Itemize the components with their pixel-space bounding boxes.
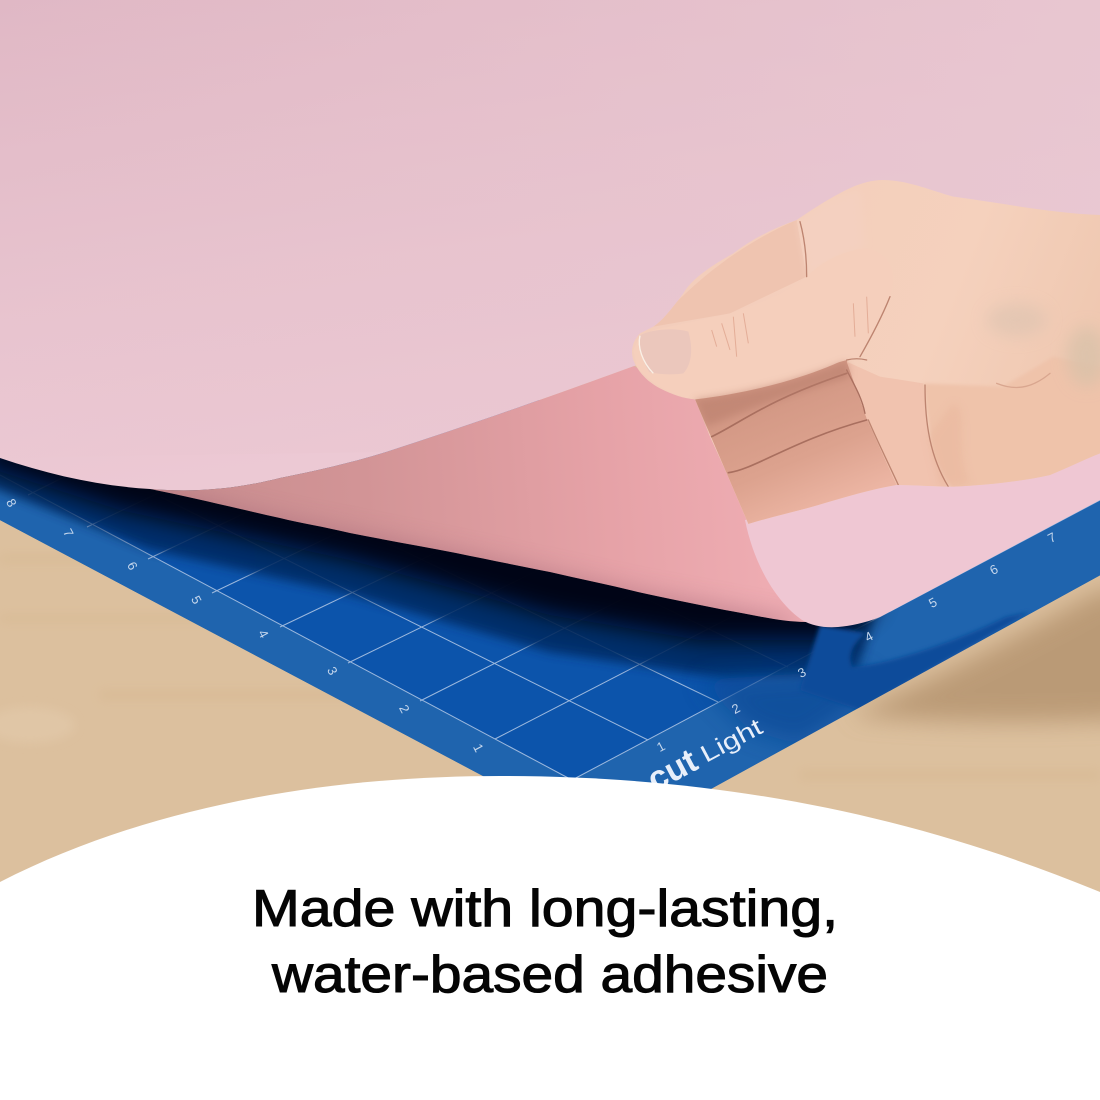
ruler numbers right edge: 3 [795, 664, 808, 681]
shadow under thumb [695, 362, 850, 427]
ruler numbers left edge: 1 [470, 741, 487, 754]
ruler numbers left edge: 3 [324, 664, 341, 677]
ruler numbers right edge [654, 529, 1058, 755]
curled fingers [695, 360, 897, 524]
ruler numbers right edge: 5 [926, 594, 939, 611]
front face beyond curl [745, 450, 1100, 627]
creases [712, 222, 1050, 487]
mat brand logo: Light [696, 713, 767, 768]
soft shadow on right mat border [700, 670, 880, 745]
ruler numbers right edge: 2 [729, 700, 742, 717]
caption heading [252, 880, 838, 1004]
white caption panel [0, 776, 1100, 1100]
top face of sheet [0, 0, 1100, 490]
ruler numbers right edge: 1 [654, 738, 667, 755]
mat border band [0, 476, 1100, 789]
ruler numbers left edge: 4 [255, 627, 272, 640]
mat brand logo [650, 720, 764, 784]
ruler numbers right edge: 7 [1045, 529, 1058, 546]
ruler numbers left edge: 8 [3, 496, 20, 509]
hand pinching the sheet [620, 170, 1100, 540]
caption heading: water-based adhesive [271, 946, 828, 1004]
curled underside of sheet [150, 366, 806, 622]
caption heading: Made with long-lasting, [252, 880, 838, 938]
mat brand logo: cut [641, 742, 704, 799]
ruler numbers right edge: 4 [862, 628, 875, 645]
ruler numbers left edge: 7 [60, 526, 77, 539]
index finger [653, 220, 807, 327]
thumb [695, 360, 846, 400]
pink sheet [0, 0, 1100, 640]
shadow cast by peeled sheet [0, 440, 880, 678]
ruler numbers left edge: 5 [188, 593, 205, 606]
wrist and lower hand [923, 357, 1100, 490]
shadow below light patch [800, 612, 1030, 710]
ruler numbers right edge: 6 [987, 561, 1000, 578]
palm fold [847, 362, 947, 487]
grid lines [0, 473, 1100, 780]
thumb nail [640, 329, 691, 374]
cutting mat [0, 400, 1100, 789]
ruler numbers left edge: 6 [124, 559, 141, 572]
mat grid area [105, 530, 737, 778]
ruler numbers left edge: 2 [396, 702, 413, 715]
thumb knuckle wrinkles [712, 297, 868, 357]
back of hand [632, 180, 1100, 522]
hand shadow on table [850, 590, 1100, 722]
ruler numbers left edge [3, 496, 487, 754]
vein tint [992, 306, 1041, 334]
